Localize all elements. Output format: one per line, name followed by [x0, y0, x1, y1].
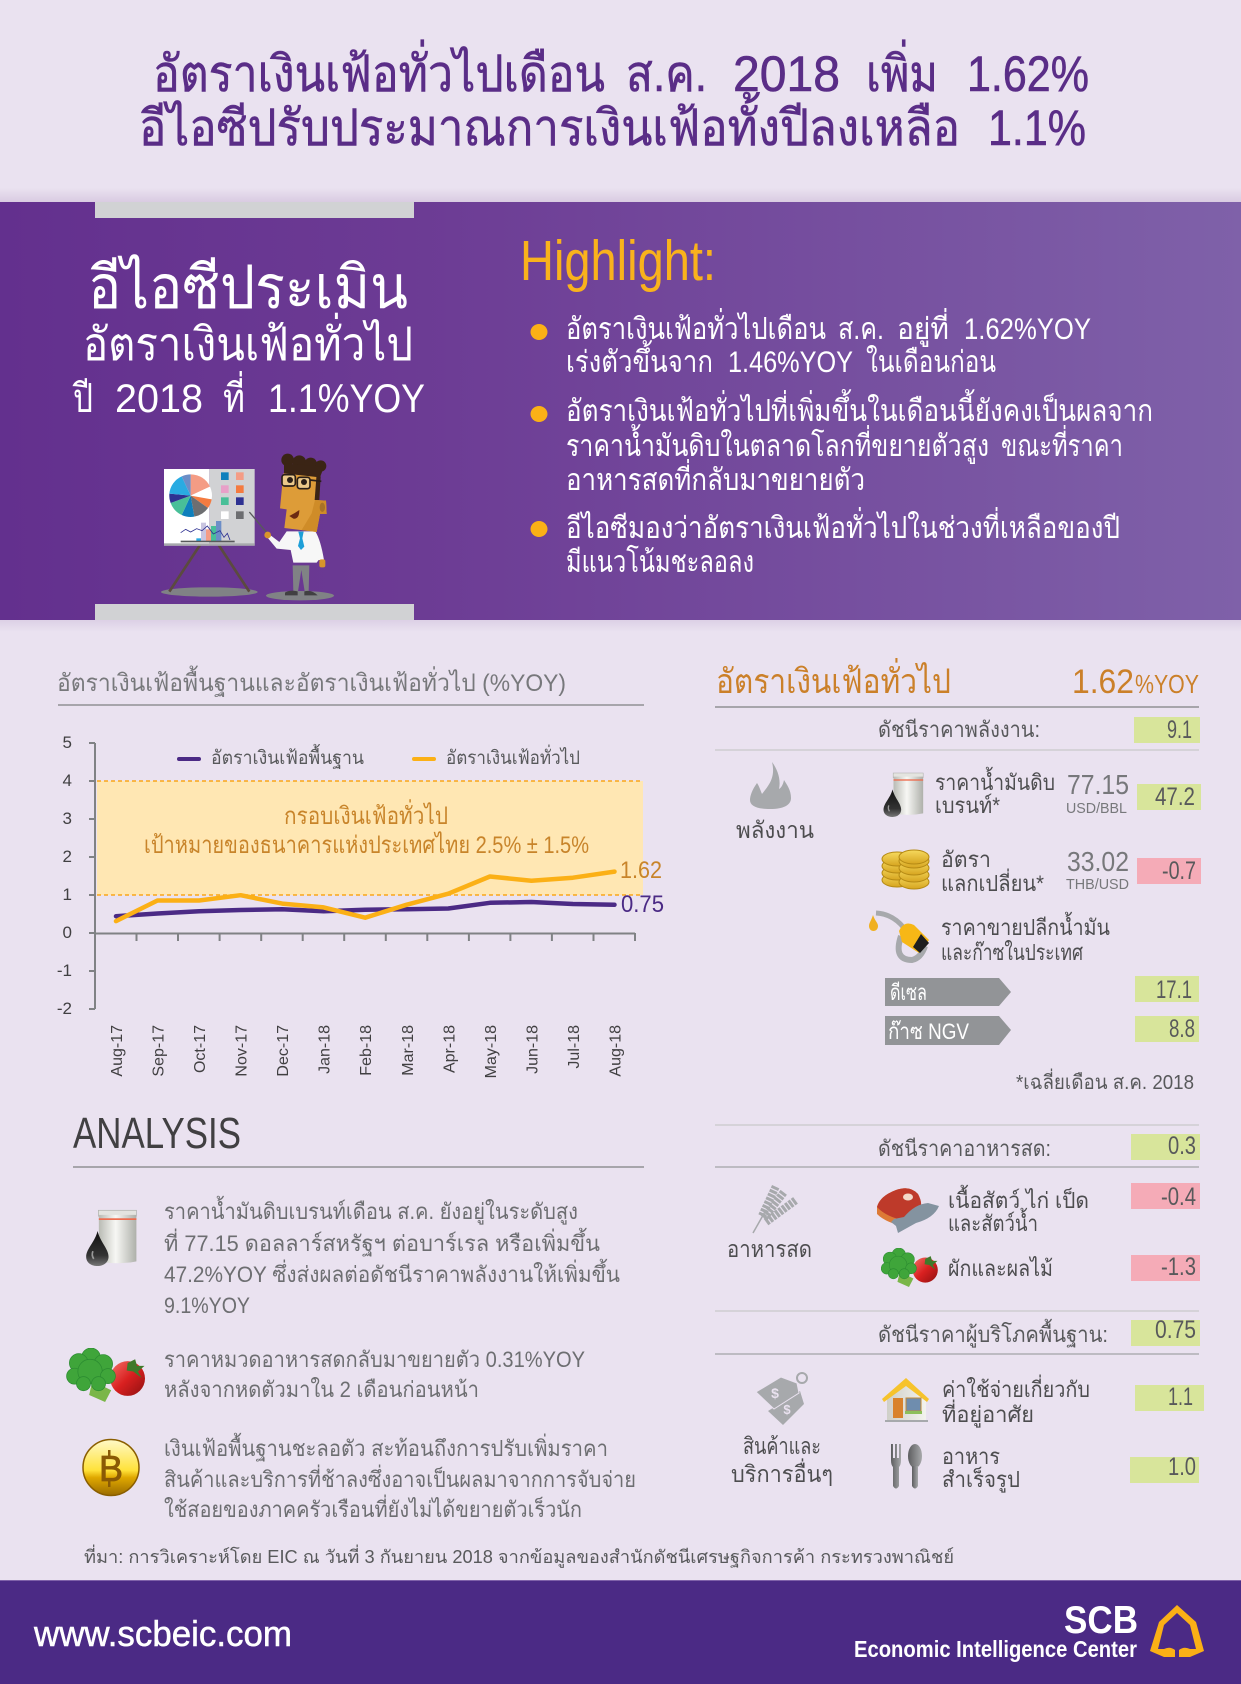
icon: baht coin: B	[99, 1448, 123, 1489]
title	[139, 40, 1089, 156]
end value labels: 1.62	[620, 857, 662, 884]
row: brent: 47.2	[1155, 783, 1195, 811]
row: exchange rate: แลกเปลี่ยน*	[941, 868, 1044, 896]
analysis item: oil: 9.1%YOY	[164, 1293, 250, 1318]
title: เพิ่ม	[866, 40, 938, 102]
analysis item: oil: ราคาน้ำมันดิบเบรนท์เดือน ส.ค. ยังอยู่ในระดับสูง	[164, 1196, 578, 1225]
icon: presenter with chart board	[161, 454, 334, 600]
energy index row: ดัชนีราคาพลังงาน:	[878, 717, 1040, 742]
row: housing: ค่าใช้จ่ายเกี่ยวกับ	[942, 1374, 1090, 1402]
row: meat: และสัตว์น้ำ	[948, 1208, 1038, 1236]
row: brent	[884, 767, 1201, 818]
highlight bullet 3	[530, 507, 1120, 579]
row: prepared food	[891, 1444, 1199, 1493]
footnote: *เฉลี่ยเดือน ส.ค. 2018	[1016, 1068, 1194, 1094]
fresh food index row: 0.3	[1168, 1132, 1196, 1160]
legend: อัตราเงินเฟ้อทั่วไป	[446, 744, 580, 769]
icon: price tags: $	[771, 1385, 779, 1401]
highlight bullet 1: 1.46%YOY	[728, 346, 853, 379]
row: exchange rate	[882, 846, 1201, 896]
highlight bullet 1: ส.ค.	[838, 313, 884, 346]
row: housing	[882, 1374, 1204, 1428]
highlight bullet 1: อัตราเงินเฟ้อทั่วไปเดือน	[566, 308, 826, 346]
website: www.scbeic.com	[33, 1613, 292, 1654]
row: diesel: ดีเซล	[890, 980, 927, 1005]
series: headline inflation	[116, 872, 614, 921]
icon: meat and fish	[877, 1188, 939, 1233]
x axis labels: Mar-18	[400, 1025, 417, 1076]
target band	[97, 781, 643, 895]
icon: house	[882, 1378, 929, 1422]
panel heading: headline inflation	[715, 658, 1199, 708]
fresh food index row	[878, 1132, 1200, 1161]
x axis labels: May-18	[483, 1025, 500, 1078]
line chart: core and headline inflation	[57, 733, 664, 1078]
category label: others: บริการอื่นๆ	[731, 1458, 833, 1487]
line chart: core and headline inflation: 0.75	[621, 891, 664, 918]
icon: flame	[750, 762, 791, 809]
panel: fresh food	[715, 1124, 1200, 1287]
y axis labels: 2	[63, 847, 72, 866]
x axis labels: Jun-18	[524, 1025, 541, 1074]
highlight bullet 2: ราคาน้ำมันดิบในตลาดโลกที่ขยายตัวสูง	[566, 424, 989, 464]
highlight bullet 2	[530, 389, 1153, 497]
highlight bullet 3: อีไอซีมองว่าอัตราเงินเฟ้อทั่วไปในช่วงที่เหลือของปี	[566, 507, 1120, 545]
panel heading: headline inflation: อัตราเงินเฟ้อทั่วไป	[716, 658, 951, 701]
row: meat: -0.4	[1161, 1183, 1196, 1211]
row: exchange rate: THB/USD	[1066, 876, 1129, 893]
x axis labels: Aug-17	[109, 1025, 126, 1077]
icon: baht coin	[83, 1440, 139, 1496]
icon: price tags: $	[783, 1402, 791, 1417]
row: prepared food: 1.0	[1168, 1453, 1196, 1481]
highlight bullet 2: อาหารสดที่กลับมาขยายตัว	[566, 459, 865, 497]
banner heading: อัตราเงินเฟ้อทั่วไป	[83, 312, 413, 370]
x axis labels: Sep-17	[150, 1025, 168, 1077]
row: diesel: 17.1	[1156, 976, 1192, 1004]
logo text: SCB	[1064, 1599, 1138, 1642]
banner heading	[73, 253, 425, 421]
core index row	[878, 1316, 1200, 1348]
row: brent: 77.15	[1067, 769, 1129, 800]
banner heading: ปี	[73, 377, 93, 421]
highlight bullet 1: 1.62%YOY	[964, 313, 1091, 346]
banner heading: ที่	[223, 371, 245, 421]
highlight bullet 1: ในเดือนก่อน	[866, 345, 996, 379]
highlight bullet 2: อัตราเงินเฟ้อทั่วไปที่เพิ่มขึ้นในเดือนนี้ยังคงเป็นผลจาก	[566, 389, 1153, 428]
highlight bullet 1: เร่งตัวขึ้นจาก	[566, 340, 713, 379]
row: ngv	[885, 1015, 1199, 1045]
series: core inflation	[116, 902, 614, 916]
category label: others: สินค้าและ	[743, 1433, 821, 1459]
analysis item: fresh food: หลังจากหดตัวมาใน 2 เดือนก่อนหน้า	[164, 1377, 479, 1402]
x axis labels	[109, 1025, 624, 1078]
icon: gold coins	[882, 850, 929, 889]
highlight bullet 1: อยู่ที่	[897, 308, 949, 347]
icon: SCB logo	[1150, 1605, 1204, 1657]
row: retail fuel: ราคาขายปลีกน้ำมัน	[941, 912, 1110, 940]
legend: อัตราเงินเฟ้อพื้นฐาน	[211, 744, 364, 769]
category label: energy: พลังงาน	[736, 817, 814, 843]
category label: others	[731, 1433, 833, 1487]
y axis labels: 0	[63, 923, 72, 942]
x axis labels: Dec-17	[275, 1025, 292, 1077]
footer: Economic Intelligence Center	[854, 1636, 1137, 1662]
highlight bullet 3: มีแนวโน้มชะลอลง	[566, 544, 754, 579]
analysis item: fresh food	[67, 1347, 585, 1402]
row: meat	[877, 1183, 1200, 1236]
analysis item: core inflation	[83, 1433, 636, 1522]
x axis labels: Apr-18	[441, 1025, 458, 1073]
axes	[89, 743, 635, 1009]
panel: other goods and services	[715, 1310, 1204, 1493]
y axis labels: -2	[57, 999, 72, 1018]
highlight heading: Highlight:	[520, 229, 716, 293]
row: retail fuel	[869, 912, 1110, 965]
icon: wheat	[753, 1186, 796, 1233]
analysis item: oil	[86, 1196, 620, 1318]
title: 1.1%	[988, 100, 1086, 156]
row: vegetables: -1.3	[1161, 1253, 1196, 1281]
energy index row	[715, 716, 1200, 751]
banner heading: 2018	[115, 377, 203, 421]
presenter figure	[249, 512, 267, 533]
footer	[0, 1580, 1241, 1684]
analysis item: oil: ที่ 77.15 ดอลลาร์สหรัฐฯ ต่อบาร์เรล หรือเพิ่มขึ้น	[164, 1228, 600, 1257]
row: exchange rate: -0.7	[1162, 857, 1196, 885]
icon: price tags	[756, 1373, 807, 1425]
row: vegetables: ผักและผลไม้	[948, 1256, 1053, 1281]
x axis labels: Oct-17	[192, 1025, 209, 1073]
analysis item: core inflation: ใช้สอยของภาคครัวเรือนที่ยังไม่ได้ขยายตัวเร็วนัก	[164, 1494, 582, 1522]
band caption: กรอบเงินเฟ้อทั่วไป	[284, 799, 448, 830]
row: housing: ที่อยู่อาศัย	[942, 1399, 1034, 1428]
row: exchange rate: 33.02	[1067, 846, 1129, 877]
row: brent: USD/BBL	[1066, 800, 1127, 817]
row: ngv: ก๊าซ NGV	[888, 1019, 969, 1044]
row: meat: เนื้อสัตว์ ไก่ เป็ด	[948, 1185, 1089, 1213]
row: diesel	[885, 976, 1199, 1006]
fresh food index row: ดัชนีราคาอาหารสด:	[878, 1136, 1051, 1161]
icon: fork and spoon	[891, 1444, 922, 1488]
title: อัตราเงินเฟ้อทั่วไปเดือน	[153, 40, 605, 102]
x axis labels: Jul-18	[566, 1025, 583, 1069]
row: ngv: 8.8	[1169, 1015, 1195, 1043]
y axis labels: 1	[63, 885, 72, 904]
analysis heading: ANALYSIS	[73, 1109, 241, 1158]
icon: vegetables	[67, 1348, 145, 1402]
core index row: ดัชนีราคาผู้บริโภคพื้นฐาน:	[878, 1319, 1108, 1348]
y axis labels: 4	[63, 771, 72, 790]
band caption	[144, 799, 589, 859]
panel: purple highlight banner	[0, 188, 1241, 632]
row: retail fuel: และก๊าซในประเทศ	[941, 940, 1083, 965]
title: 1.62%	[967, 46, 1089, 102]
core index row: 0.75	[1155, 1316, 1196, 1344]
title: 2018	[733, 46, 840, 102]
y axis labels: 3	[63, 809, 72, 828]
icon: fuel nozzle	[869, 913, 929, 960]
banner heading: 1.1%YOY	[268, 377, 425, 421]
row: prepared food: สำเร็จรูป	[942, 1465, 1020, 1493]
panel heading: headline inflation: %YOY	[1135, 669, 1199, 699]
analysis item: fresh food: ราคาหมวดอาหารสดกลับมาขยายตัว 0.31%YOY	[164, 1347, 585, 1372]
x axis labels: Aug-18	[608, 1025, 624, 1077]
highlight bullet 1	[530, 308, 1091, 379]
title: อีไอซีปรับประมาณการเงินเฟ้อทั้งปีลงเหลือ	[139, 92, 960, 156]
energy index row: 9.1	[1167, 716, 1192, 744]
band caption: เป้าหมายของธนาคารแห่งประเทศไทย 2.5% ± 1.5%	[144, 831, 589, 859]
analysis item: core inflation: สินค้าและบริการที่ช้าลงซึ่งอาจเป็นผลมาจากการจับจ่าย	[164, 1464, 636, 1492]
row: vegetables	[881, 1248, 1200, 1287]
row: exchange rate: อัตรา	[941, 847, 991, 872]
chart heading: อัตราเงินเฟ้อพื้นฐานและอัตราเงินเฟ้อทั่วไป (%YOY)	[57, 665, 566, 697]
source note: ที่มา: การวิเคราะห์โดย EIC ณ วันที่ 3 กันยายน 2018 จากข้อมูลของสำนักดัชนีเศรษฐกิจการค้า กระทรวงพาณิชย์	[84, 1544, 954, 1568]
row: prepared food: อาหาร	[942, 1444, 1000, 1469]
title: ส.ค.	[626, 46, 707, 102]
row: brent: เบรนท์*	[935, 793, 1000, 818]
x axis labels: Nov-17	[234, 1025, 251, 1077]
legend	[177, 744, 580, 769]
category label: fresh food: อาหารสด	[727, 1236, 812, 1262]
y axis labels: -1	[57, 961, 72, 980]
analysis item: core inflation: เงินเฟ้อพื้นฐานชะลอตัว สะท้อนถึงการปรับเพิ่มราคา	[164, 1433, 608, 1462]
highlight bullet 2: ขณะที่ราคา	[1001, 425, 1123, 463]
panel heading: headline inflation: 1.62	[1072, 663, 1134, 701]
x axis labels: Feb-18	[358, 1025, 375, 1076]
y axis labels: 5	[63, 733, 72, 752]
y axis labels	[57, 733, 72, 1018]
row: housing: 1.1	[1168, 1383, 1193, 1411]
analysis item: oil: 47.2%YOY ซึ่งส่งผลต่อดัชนีราคาพลังงานให้เพิ่มขึ้น	[164, 1259, 620, 1287]
icon: oil tank	[86, 1210, 136, 1266]
x axis labels: Jan-18	[317, 1025, 334, 1074]
panel: energy	[715, 716, 1201, 1094]
banner heading: อีไอซีประเมิน	[88, 253, 408, 321]
row: brent: ราคาน้ำมันดิบ	[935, 767, 1055, 795]
